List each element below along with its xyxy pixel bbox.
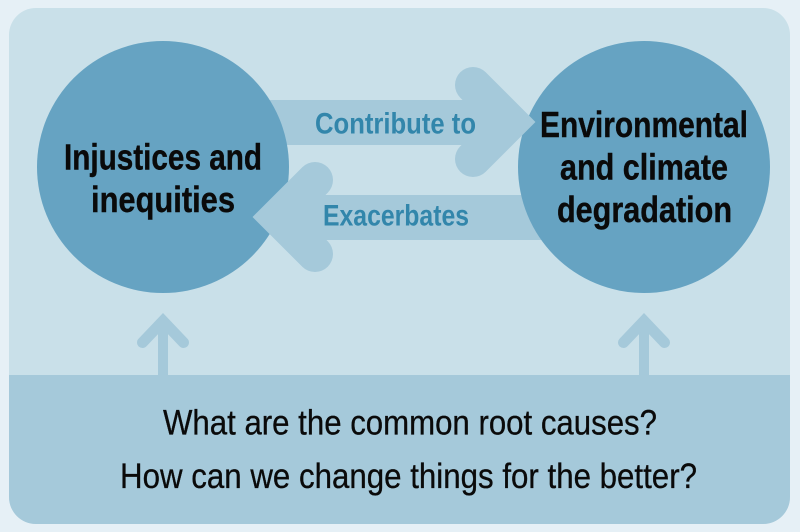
arrow head: contribute to: [473, 85, 510, 159]
circle label: environmental and climate degradation: degradation: [557, 189, 732, 230]
arrow shaft: exacerbates: [300, 195, 550, 240]
question: root causes: What are the common root causes?: [163, 404, 657, 442]
question: change for the better: How can we change things for the better?: [120, 457, 697, 496]
arrow: right up arrow: [624, 320, 664, 375]
circle label: injustices and inequities: Injustices and: [64, 136, 262, 178]
circle: environmental and climate degradation: [518, 41, 770, 293]
circle label: injustices and inequities: inequities: [91, 179, 235, 220]
panel: root causes band: [9, 375, 790, 524]
circle label: environmental and climate degradation: Environmental: [540, 104, 748, 145]
label: exacerbates: Exacerbates: [323, 200, 469, 232]
label: contribute to: Contribute to: [315, 108, 476, 140]
arrow: left up arrow: [142, 320, 184, 375]
arrow head: exacerbates: [278, 180, 315, 254]
circle label: environmental and climate degradation: and climate: [560, 146, 728, 188]
circle: injustices and inequities: [37, 41, 289, 293]
arrow shaft: contribute to: [250, 100, 490, 145]
